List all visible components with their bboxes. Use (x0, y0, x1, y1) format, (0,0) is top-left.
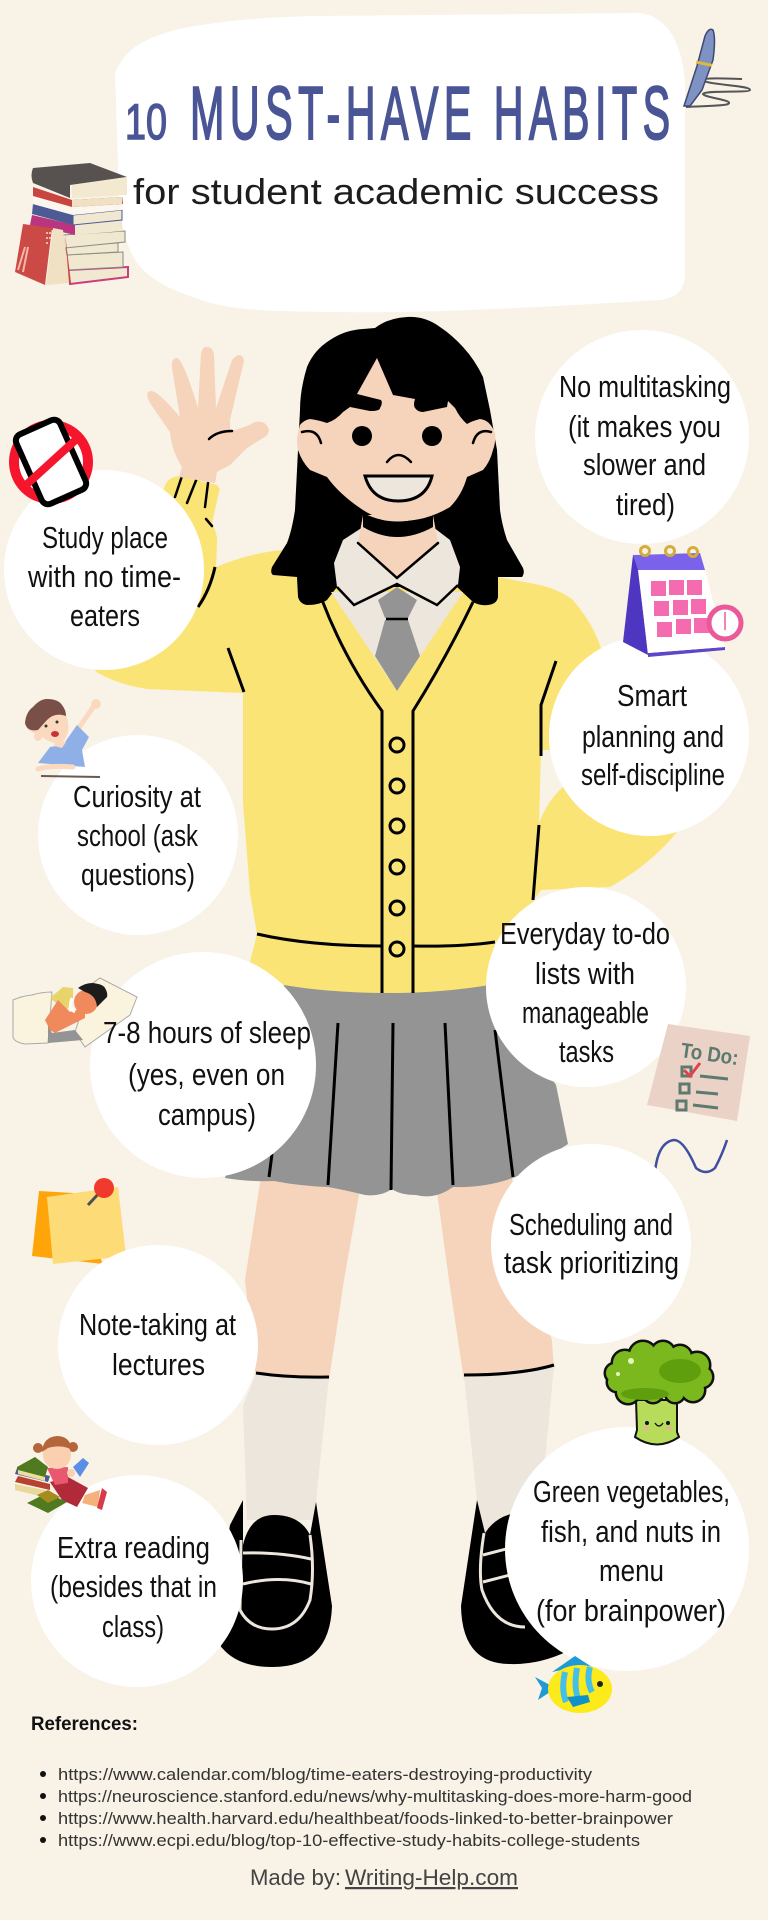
habit: everyday to-do lists: manageable (522, 995, 649, 1030)
habit: sleep: (yes, even on (128, 1057, 285, 1092)
habit: everyday to-do lists: Everyday to-do (500, 916, 670, 951)
character: legs (245, 1170, 554, 1380)
character: socks (243, 1366, 554, 1540)
character: smile (365, 476, 432, 501)
habit: extra reading (31, 1475, 243, 1687)
character: collar (334, 527, 460, 605)
character: choker (363, 513, 433, 537)
character: collar opening (358, 543, 438, 578)
habit: no multitasking: tired) (616, 487, 675, 522)
reference list: https://www.ecpi.edu/blog/top-10-effective-study-habits-college-students (58, 1831, 640, 1850)
character: skirt (225, 985, 568, 1196)
habit: sleep: campus) (158, 1097, 256, 1132)
icon: girl reading (15, 1436, 107, 1513)
habit: scheduling (491, 1144, 691, 1344)
character: left shoe (212, 1500, 332, 1667)
icon: stack of books (15, 163, 128, 285)
character: tie (375, 587, 420, 691)
habit: extra reading: (besides that in (50, 1569, 217, 1604)
credit (250, 1865, 518, 1890)
reference list: https://www.calendar.com/blog/time-eaters-destroying-productivity (58, 1765, 593, 1784)
references heading: References: (31, 1714, 138, 1735)
habit: smart planning (549, 636, 749, 836)
character: hair (271, 317, 524, 605)
reference list (40, 1765, 692, 1850)
habit: scheduling: task prioritizing (504, 1245, 679, 1280)
habit: everyday to-do lists: lists with (535, 956, 635, 991)
character: sock tops (256, 1365, 554, 1377)
habit: smart planning: planning and (582, 719, 724, 754)
character: cardigan lines (198, 567, 556, 993)
references (31, 1714, 692, 1850)
habit: no multitasking: (it makes you (568, 409, 721, 444)
title heading: 10 (125, 94, 167, 150)
character: skirt pleats (269, 1023, 513, 1190)
title heading: MUST-HAVE HABITS (190, 71, 670, 155)
habit: curiosity: Curiosity at (73, 779, 201, 814)
habit: note-taking: lectures (112, 1347, 205, 1382)
character: gap between arm and torso (539, 750, 585, 823)
icon: broccoli (605, 1341, 713, 1444)
icon: fish (535, 1656, 612, 1713)
habit: smart planning: Smart (617, 678, 687, 713)
habit: everyday to-do lists: tasks (559, 1034, 614, 1069)
character: cuff lines (175, 476, 212, 526)
character: hand (147, 347, 269, 483)
habit: brain food: (for brainpower) (536, 1593, 726, 1628)
habit: study place: Study place (42, 520, 168, 555)
subtitle: for student academic success (133, 171, 659, 212)
icon: calendar (623, 546, 741, 657)
habit: study place: with no time- (27, 559, 181, 594)
character: right shoe (461, 1500, 570, 1664)
habit: brain food: fish, and nuts in (541, 1514, 721, 1549)
habit: everyday to-do lists (486, 887, 686, 1087)
character: cardigan (60, 476, 677, 993)
habit: curiosity: school (ask (77, 818, 198, 853)
character: face (297, 358, 495, 521)
character: eyes (352, 426, 442, 446)
icon: sleeping student (13, 978, 137, 1047)
reference list: https://www.health.harvard.edu/healthbeat/foods-linked-to-better-brainpower (58, 1809, 673, 1828)
habit: note-taking: Note-taking at (79, 1307, 236, 1342)
habit: curiosity (38, 735, 238, 935)
student character (60, 317, 677, 1667)
habit: scheduling: Scheduling and (509, 1207, 673, 1242)
habit: sleep: 7-8 hours of sleep (103, 1015, 311, 1050)
icon: to-do note: To Do: (679, 1039, 740, 1070)
habit: no multitasking (535, 330, 749, 544)
habit: brain food (505, 1427, 749, 1671)
title panel (115, 13, 685, 312)
character: palm line (209, 431, 232, 439)
habit: no multitasking: slower and (583, 447, 706, 482)
habit: smart planning: self-discipline (581, 757, 725, 792)
habit: study place (4, 470, 204, 670)
character: neck (358, 515, 438, 578)
habit: sleep (13, 952, 316, 1178)
habit: extra reading: Extra reading (57, 1530, 210, 1565)
reference list: https://neuroscience.stanford.edu/news/why-multitasking-does-more-harm-good (58, 1787, 692, 1806)
icon: to-do note (647, 1024, 750, 1121)
icon: boy raising hand (25, 699, 101, 777)
icon: sticky note (32, 1178, 126, 1264)
habit: note-taking (58, 1245, 258, 1445)
character: nose and ears (302, 431, 491, 462)
habit: no multitasking: No multitasking (559, 369, 731, 404)
credit: Made by: (250, 1865, 341, 1890)
title blob (115, 13, 685, 312)
habit: brain food: menu (599, 1553, 664, 1588)
icon: no phone (14, 418, 88, 506)
icon: pen (684, 29, 750, 107)
habit: curiosity: questions) (81, 857, 195, 892)
decoration: squiggle (655, 1140, 727, 1172)
credit: Writing-Help.com (345, 1865, 518, 1890)
character: shirt (331, 592, 463, 691)
character: buttons (390, 738, 404, 956)
habit: study place: eaters (70, 598, 140, 633)
habit: extra reading: class) (102, 1609, 164, 1644)
